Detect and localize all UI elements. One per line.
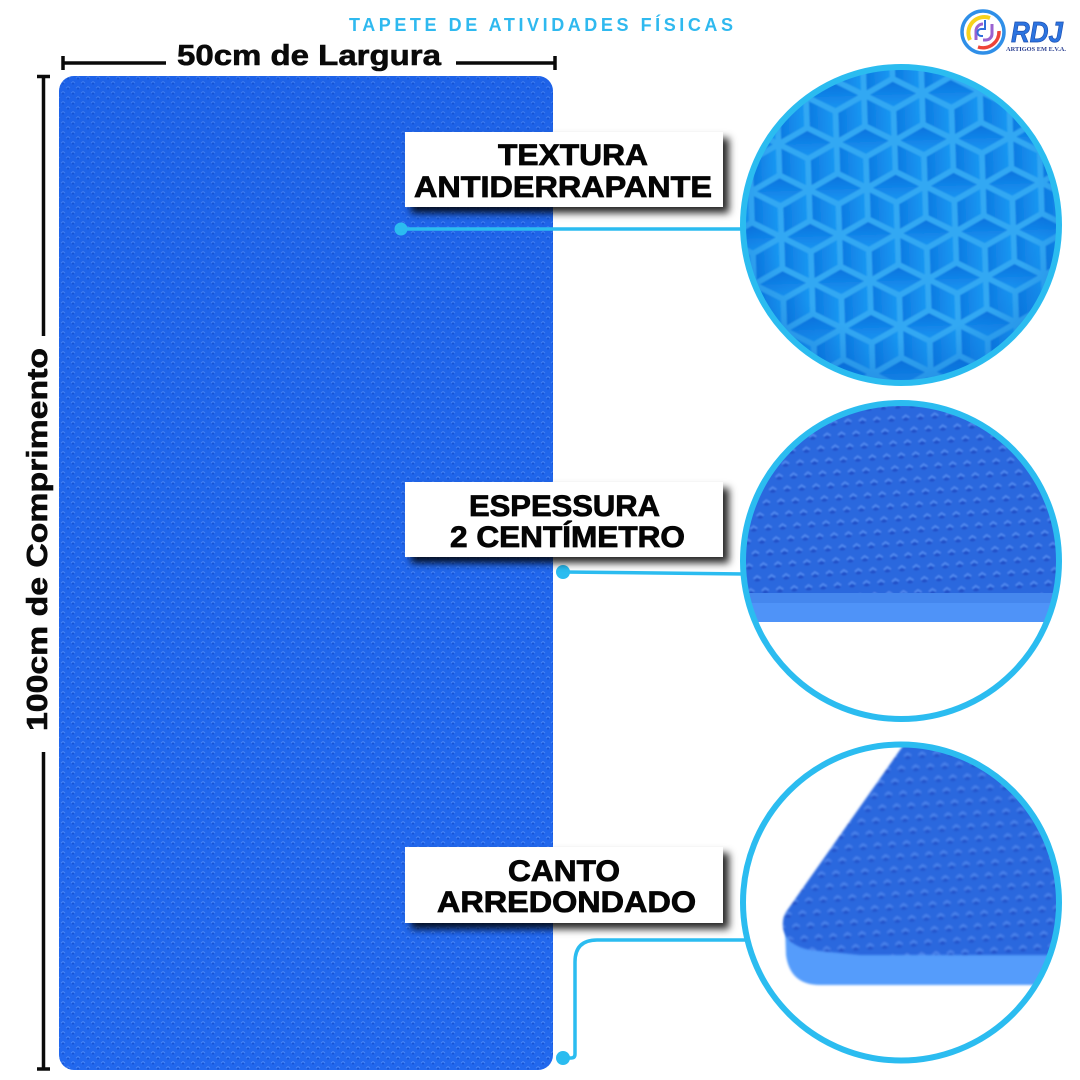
width dimension: 50cm de Largura: 50cm de Largura xyxy=(177,40,442,72)
connector: thickness xyxy=(556,565,745,579)
label: espessura 2 centímetro: 2 CENTÍMETRO xyxy=(450,520,685,554)
blue mat xyxy=(59,76,553,1070)
length dimension: 100cm de Comprimento: 100cm de Comprimento xyxy=(22,348,54,731)
label: textura antiderrapante: TEXTURA xyxy=(498,139,648,172)
logo: RDJ Artigos em E.V.A. xyxy=(962,11,1067,53)
label: textura antiderrapante: ANTIDERRAPANTE xyxy=(414,171,712,204)
title: TAPETE DE ATIVIDADES FÍSICAS xyxy=(349,14,733,35)
label: canto arredondado: ARREDONDADO xyxy=(437,886,696,919)
connector: rounded corner xyxy=(556,940,745,1065)
label: espessura 2 centímetro: ESPESSURA xyxy=(469,490,660,523)
label: espessura 2 centímetro xyxy=(405,482,723,557)
connector: texture xyxy=(394,222,745,236)
circle: texture detail xyxy=(740,64,1062,386)
circle: rounded corner detail xyxy=(743,740,1070,1060)
width dimension: 50cm de Largura xyxy=(63,40,555,72)
label: textura antiderrapante xyxy=(405,132,723,207)
length dimension: 100cm de Comprimento xyxy=(22,76,54,1069)
circle: thickness detail xyxy=(735,395,1070,719)
label: canto arredondado: CANTO xyxy=(508,855,620,888)
logo: RDJ Artigos em E.V.A.: ARTIGOS EM E.V.A. xyxy=(1006,47,1067,53)
logo: RDJ Artigos em E.V.A.: RDJ xyxy=(1011,17,1064,49)
label: canto arredondado xyxy=(405,847,723,923)
